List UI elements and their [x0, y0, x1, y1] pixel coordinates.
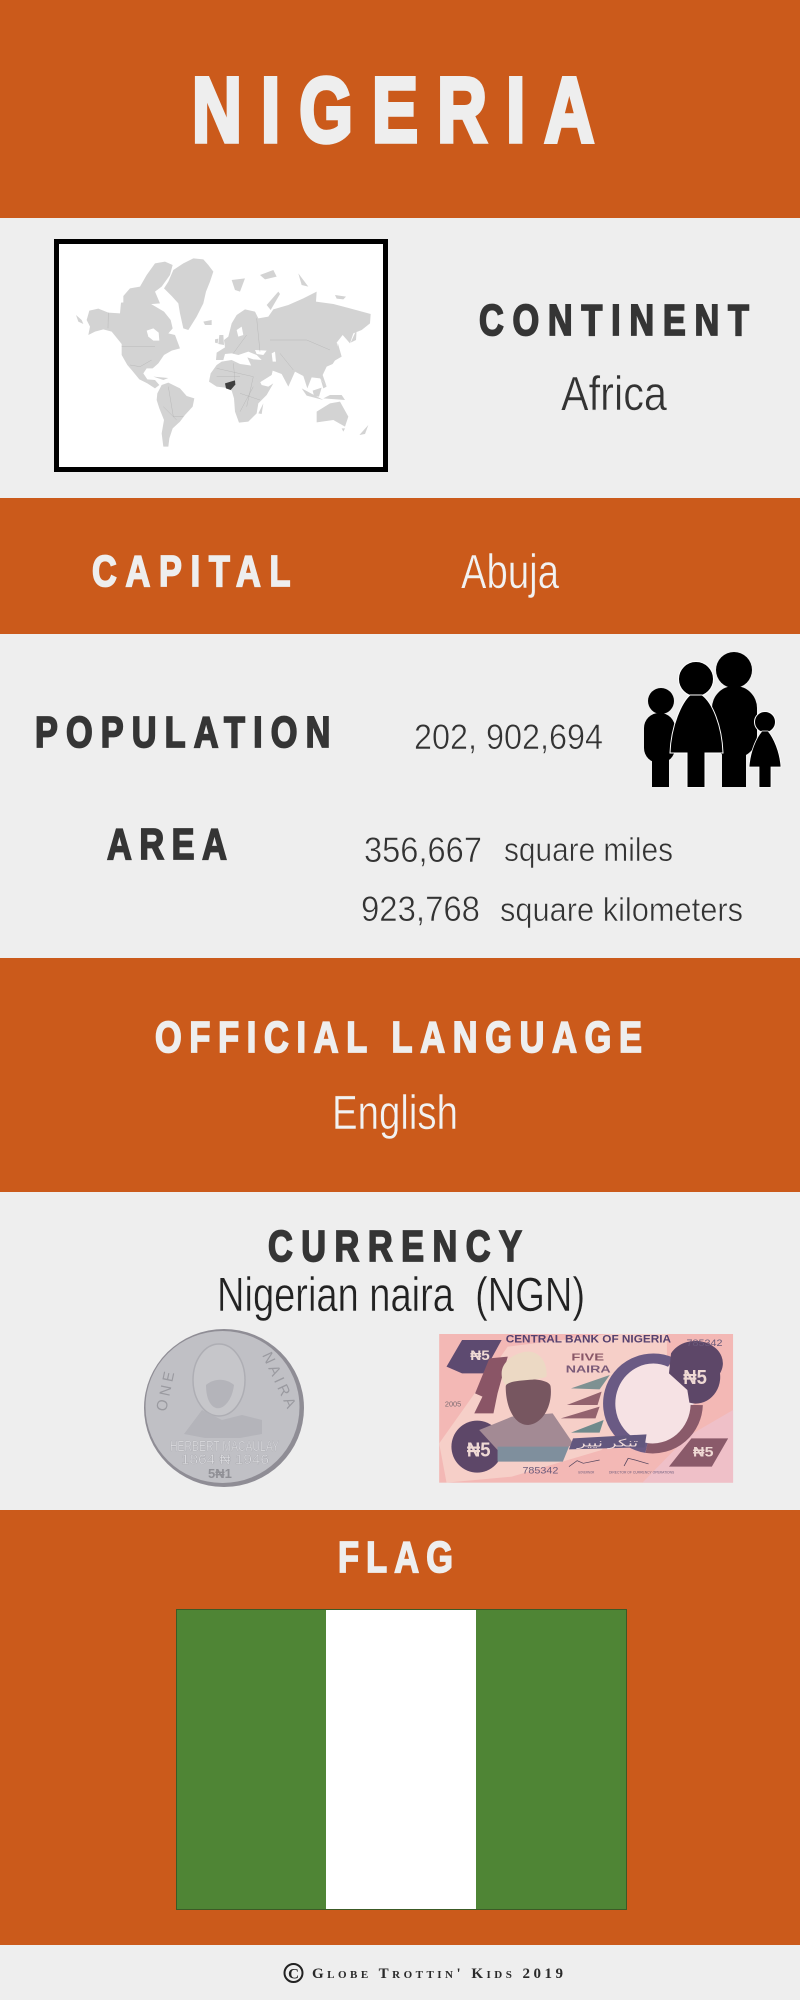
footer credit: Globe Trottin' Kids 2019	[312, 1966, 563, 1982]
title: NIGERIA	[192, 59, 613, 162]
world map locator	[54, 239, 388, 472]
icon: one naira coin: HERBERT MACAULAY	[170, 1438, 279, 1455]
capital value: Abuja	[461, 546, 559, 599]
icon: five naira banknote	[439, 1332, 733, 1483]
icon: five naira banknote: 785342	[687, 1339, 723, 1349]
area heading: AREA	[107, 820, 234, 869]
area in square kilometers: square kilometers	[500, 891, 743, 928]
panel: population and area	[0, 634, 800, 958]
icon: one naira coin: 5₦1	[208, 1466, 232, 1481]
icon: one naira coin: ONE	[153, 1370, 178, 1413]
area in square miles: square miles	[504, 831, 673, 868]
icon: five naira banknote: 2005	[445, 1400, 462, 1408]
icon: five naira banknote: تنكر نيير	[576, 1437, 638, 1449]
panel: currency	[0, 1192, 800, 1510]
panel: official language	[0, 958, 800, 1192]
icon: five naira banknote: 785342	[522, 1466, 559, 1476]
capital heading: CAPITAL	[92, 547, 299, 596]
panel: title banner	[0, 0, 800, 218]
population heading: POPULATION	[35, 708, 338, 757]
Nigeria highlighted on map	[225, 380, 235, 390]
area in square kilometers	[361, 890, 743, 929]
area in square miles	[364, 831, 673, 870]
icon: five naira banknote: ₦5	[683, 1365, 707, 1388]
flag heading: FLAG	[338, 1533, 460, 1582]
flag of Nigeria	[176, 1610, 626, 1910]
icon: five naira banknote: GOVERNOR	[578, 1471, 595, 1474]
population value: 202, 902,694	[414, 718, 603, 757]
panel: capital	[0, 498, 800, 634]
currency heading: CURRENCY	[268, 1222, 530, 1271]
icon: five naira banknote: NAIRA	[566, 1364, 611, 1375]
icon: five naira banknote: ₦5	[470, 1348, 490, 1364]
language value: English	[332, 1087, 458, 1140]
panel: continent	[0, 218, 800, 498]
continent heading: CONTINENT	[479, 296, 758, 345]
continent value: Africa	[561, 368, 667, 421]
icon: one naira coin	[144, 1329, 304, 1487]
area in square miles: 356,667	[364, 831, 482, 870]
area in square kilometers: 923,768	[361, 890, 480, 929]
icon: five naira banknote: ₦5	[693, 1445, 714, 1460]
currency value: Nigerian naira (NGN)	[217, 1269, 585, 1322]
icon: five naira banknote: DIRECTOR OF CURRENCY OPERATIONS	[609, 1471, 675, 1474]
icon: five naira banknote: CENTRAL BANK OF NIGERIA	[506, 1332, 671, 1345]
icon: one naira coin: NAIRA	[258, 1350, 299, 1411]
icon: one naira coin: 1864 ₦ 1946	[181, 1451, 269, 1467]
icon: family silhouette	[644, 652, 781, 787]
footer credit: C	[288, 1966, 299, 1982]
icon: five naira banknote: ₦5	[467, 1438, 491, 1461]
icon: five naira banknote: FIVE	[571, 1353, 604, 1363]
language heading: OFFICIAL LANGUAGE	[155, 1013, 650, 1062]
panel: flag	[0, 1510, 800, 1945]
